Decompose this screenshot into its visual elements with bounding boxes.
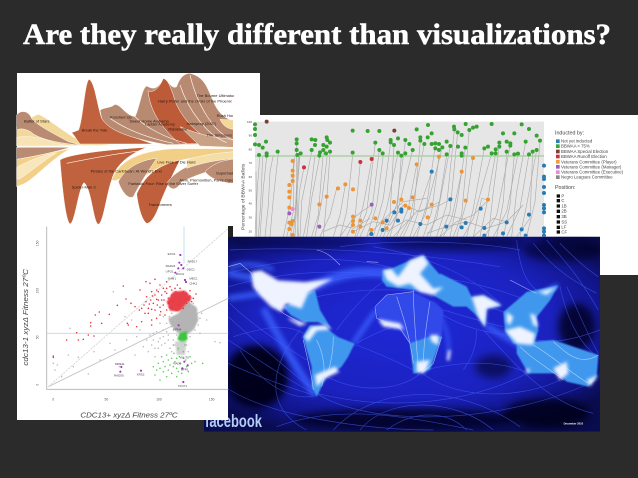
streamgraph movie labels: Alvin, Premonition, Pan's Ogre [179,177,234,182]
broad glowing route beams [228,264,558,395]
gene labels: UFO1 [166,269,174,273]
gene labels: DDC1 [187,268,195,272]
veterans manager points [289,205,372,227]
gene labels: RAD24 [166,264,176,268]
dark gap between panels [228,226,233,237]
gene labels [114,252,198,388]
data points [255,122,544,236]
ballot history lines [255,130,540,237]
streamgraph movie labels: Superbad [216,171,233,176]
x axis title: CDC13+ xyzΔ Fitness 27ºC [80,412,179,419]
y axis labels: 80 [249,147,252,151]
legend: position: CF [561,229,567,234]
gene labels: EXO1 [168,252,176,256]
y axis title: Percentage of BBWAA Ballots [241,163,247,230]
legend: inducted by: Inducted by: [555,130,584,136]
streamgraph movie labels: Rush Hour 3 [217,113,240,118]
purple points [120,255,188,382]
x axis tick labels: 150 [209,397,215,401]
gray points [53,292,220,377]
75% threshold line [255,155,544,157]
inducted by BBWAA points [255,124,540,156]
y axis tick labels: 50 [35,335,39,339]
legend: inducted by: BBWAA Special Election [561,149,609,154]
title: Are they really different than visualizations? [23,18,611,51]
streamgraph movie labels: Break the Tide [82,127,108,132]
y axis labels: 60 [249,175,252,179]
streamgraph movie labels: Harry Potter and the Order of the Phoenix [158,99,232,104]
legend: position: 1B [561,203,567,208]
veterans executive point [290,207,295,211]
streamgraph movie labels [24,93,240,207]
panel: Facebook friendship world map [204,236,603,432]
gene labels: RAD50 [114,374,124,378]
continents: bright population hubs [251,255,598,387]
continents: light blue land [283,255,598,397]
x axis tick labels: 100 [156,397,162,401]
legend: position: Position: [555,185,575,191]
streamgraph movie labels: Spider-Man 3 [72,184,96,189]
legend: position: LF [561,225,567,230]
red points [53,279,196,357]
legend: inducted by [555,130,624,180]
streamgraph movie labels: Ratatouille [168,126,188,131]
gene labels: CHK1 [189,281,198,285]
legend: position: SS [561,219,567,224]
legend: position: 3B [561,214,567,219]
y axis tick labels: 150 [35,240,39,246]
y axis labels [247,120,252,233]
y axis tick labels: 100 [35,288,39,293]
streamgraph movie labels: Pirates of the Caribbean: At World's End [91,168,162,173]
y axis tick labels [35,240,39,386]
legend: inducted by: Not yet inducted [561,139,593,144]
runoff election points [304,159,372,167]
x axis tick labels: 50 [104,397,108,401]
white coastline highlights [228,250,598,390]
gene labels: BFR1 [181,367,189,371]
legend: position: P [561,193,564,198]
y axis labels: 50 [249,188,252,192]
legend: inducted by: BBWAA > 75% [561,143,590,148]
gene labels: RPN4 [173,327,182,331]
white seam strokes [17,75,233,163]
gene labels: DUN1 [176,272,184,276]
dark ocean regions [225,236,603,432]
scatter points [53,255,220,382]
gene labels: RAD17 [188,260,198,264]
dense clusters [167,291,198,355]
legend: position: 2B [561,209,567,214]
streamgraph movie labels: The Bourne Ultimatum [197,93,237,98]
streamgraph movie labels: Transformers [148,202,172,207]
panel: fitness scatter plot [17,226,228,420]
y axis labels: 70 [249,161,252,165]
gene labels: SHM1 [168,276,176,280]
panel: BBWAA ballots trajectory chart [233,115,638,275]
legend: inducted by: Veterans Committee (Player) [561,159,617,164]
veterans committee points [289,157,488,235]
connection arcs [228,240,600,430]
gene labels: YKU70 [179,355,189,359]
plot background [255,122,544,237]
y axis labels: 40 [249,202,252,206]
not yet inducted points [371,166,544,236]
streamgraph movie labels: The Simpsons [207,133,232,138]
reference lines [47,227,228,387]
streamgraph movie labels: Knocked Up [110,115,132,120]
map ocean background [204,237,600,432]
streamgraph movie labels: Hairspray (2007) [187,121,217,126]
panel: streamgraph of movies [17,73,260,226]
legend: inducted by: BBWAA Runoff Election [561,154,607,159]
x axis tick labels: 0 [52,397,54,401]
legend: position [555,185,575,234]
streamgraph movie labels: Fantastic Four: Rise of the Silver Surfer [128,181,199,186]
special election points [267,122,394,131]
gene labels: XRS2 [137,373,145,377]
y axis labels: 100 [247,120,252,124]
map wordmark: facebook: facebook [205,411,262,431]
gene labels: RAD9 [173,362,182,366]
legend: position: C [561,198,564,203]
x axis tick labels [52,397,215,401]
map credit: December 2010 [564,422,584,426]
green points [153,345,203,380]
y axis labels: 20 [249,229,252,233]
legend: inducted by: Veterans Committee (Manager) [561,164,622,169]
plot frame [47,227,228,389]
y axis tick labels: 0 [35,384,39,386]
streamgraph movie labels: Batter of Stars [24,118,49,123]
legend: inducted by: Veterans Committee (Executive) [561,170,624,175]
y axis labels: 30 [249,216,252,220]
gene labels: MEC1 [189,276,198,280]
gene labels: MRE11 [115,362,125,366]
streamgraph movie labels: Live Free or Die Hard [157,160,195,165]
legend: inducted by: Negro Leagues Committee [561,175,613,180]
gene labels: YKU71 [178,384,187,388]
streamgraph layers [17,73,233,224]
streamgraph movie labels: Ladder Academy [145,122,175,127]
streamgraph movie labels: Sweet Home Alabama [129,119,170,124]
y axis title: cdc13-1 xyzΔ Fitness 27ºC [23,268,30,366]
y axis labels: 90 [249,133,252,137]
